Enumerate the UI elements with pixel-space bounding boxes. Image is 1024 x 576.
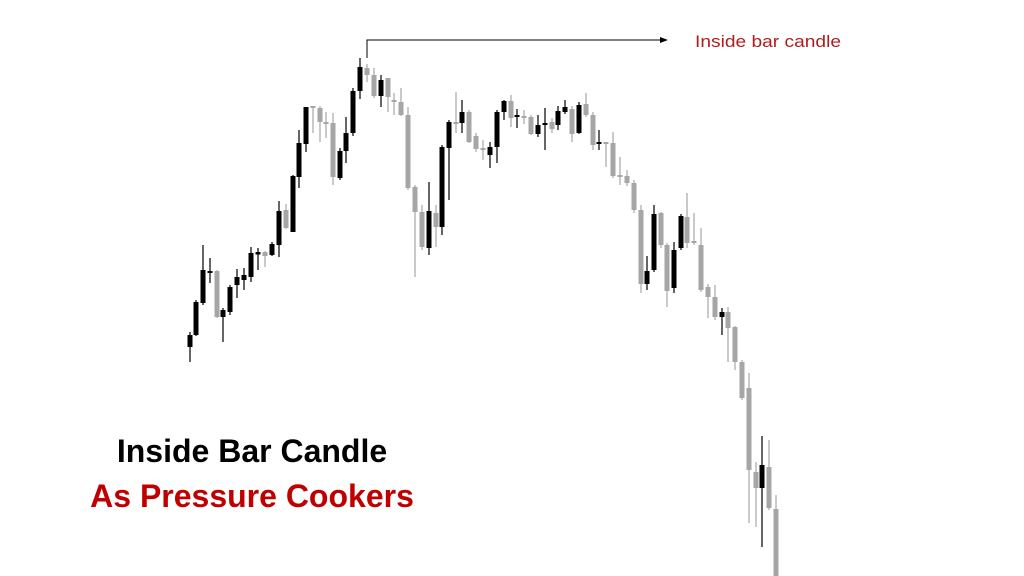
- title line 2: As Pressure Cookers: [90, 478, 414, 514]
- label: inside bar candle: Inside bar candle: [695, 32, 841, 51]
- title line 1: Inside Bar Candle: [117, 433, 387, 469]
- arrow: pointer to inside bar: [367, 37, 668, 58]
- candles data: [188, 58, 778, 576]
